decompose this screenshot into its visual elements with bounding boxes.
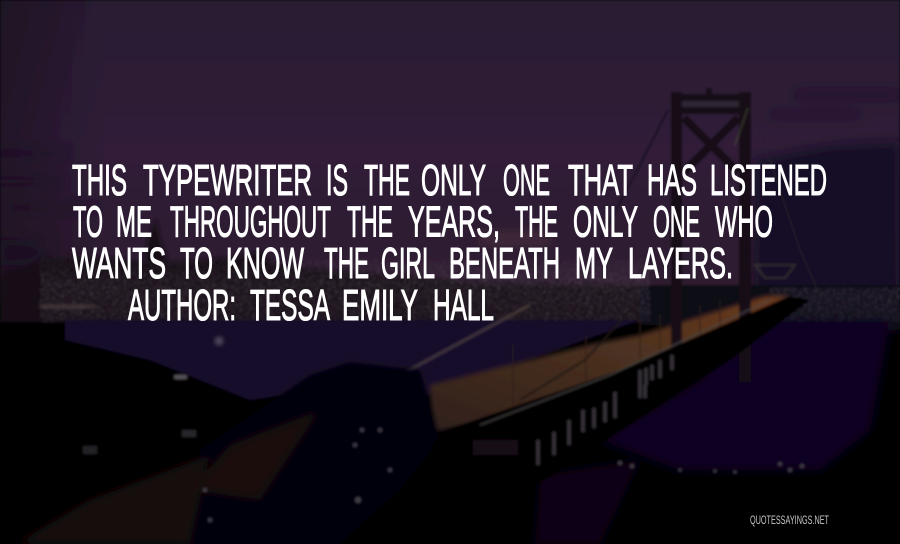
quote line 1: HAS xyxy=(647,157,697,205)
watermark: QUOTESSAYINGS.NET xyxy=(750,513,829,527)
quote line 1: ONLY xyxy=(421,157,486,205)
quote line 2: THE xyxy=(515,198,558,246)
quote line 3: WANTS xyxy=(72,240,166,288)
author line: EMILY xyxy=(342,282,418,330)
quote line 1: THE xyxy=(364,157,410,205)
quote line 1: TYPEWRITER xyxy=(143,157,312,205)
quote line 2: ME xyxy=(116,198,152,246)
quote line 1: THAT xyxy=(568,157,633,205)
bridge roadway xyxy=(400,296,790,432)
quote line 2: ONLY xyxy=(573,198,638,246)
bridge tower and cables xyxy=(600,88,822,382)
author line: HALL xyxy=(433,282,494,330)
author line: TESSA xyxy=(250,282,330,330)
quote line 3 xyxy=(72,240,733,288)
quote line 2: ONE xyxy=(653,198,700,246)
quote line 2: THROUGHOUT xyxy=(170,198,331,246)
quote line 2 xyxy=(73,198,773,246)
quote text xyxy=(72,157,827,330)
quote line 1: ONE xyxy=(503,157,550,205)
quote line 3: THE xyxy=(324,240,369,288)
quote line 3: MY xyxy=(575,240,613,288)
quote line 2: YEARS, xyxy=(408,198,500,246)
quote line 3: BENEATH xyxy=(449,240,560,288)
quote line 1: IS xyxy=(326,157,348,205)
quote line 3: KNOW xyxy=(226,240,304,288)
quote line 2: WHO xyxy=(715,198,773,246)
dusk sky xyxy=(0,0,900,330)
author line xyxy=(128,282,494,330)
bay water xyxy=(65,320,890,544)
author line: AUTHOR: xyxy=(128,282,236,330)
quote line 2: TO xyxy=(73,198,103,246)
quote line 3: TO xyxy=(180,240,213,288)
quote line 1 xyxy=(72,157,827,205)
quote line 1: THIS xyxy=(72,157,127,205)
city skyline and lights xyxy=(0,218,900,325)
quote line 3: GIRL xyxy=(381,240,435,288)
quote line 2: THE xyxy=(347,198,393,246)
foreground hill, trees and lower bridge span xyxy=(0,296,810,544)
quote line 3: LAYERS. xyxy=(628,240,733,288)
